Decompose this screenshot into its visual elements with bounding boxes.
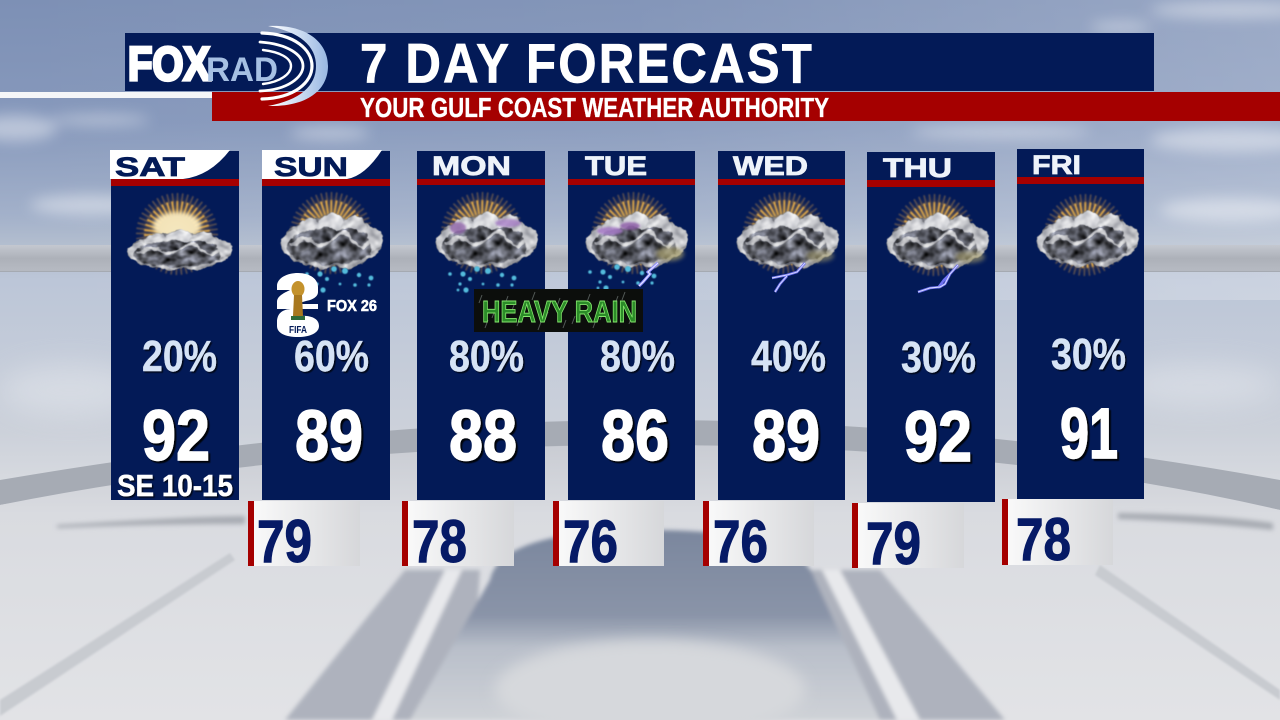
high temperature: 89	[752, 397, 820, 476]
icon: storm cloud, lightning	[737, 191, 839, 292]
FIFA wordmark: FIFA	[289, 325, 307, 336]
red subtitle bar	[212, 92, 1280, 121]
day label: SAT	[110, 150, 230, 182]
logo: FIFA World Cup 26 and FOX 26	[277, 273, 377, 337]
day label: FRI: FRI	[1032, 150, 1081, 180]
day label: SUN	[262, 150, 382, 182]
logo: FOX RAD: RAD	[206, 51, 278, 89]
low temperature: Sunday: 79	[257, 508, 312, 575]
panel: Sunday	[262, 150, 390, 500]
low temperature: Thursday	[852, 503, 964, 577]
rain chance: 20%	[142, 332, 217, 381]
day label: THU: THU	[883, 153, 952, 183]
navy title bar	[125, 33, 1154, 91]
low temperature: Friday	[1002, 499, 1113, 573]
low temperature: Wednesday	[703, 501, 814, 575]
day label: MON: MON	[432, 151, 511, 181]
white rule	[0, 92, 212, 98]
low temperature: Tuesday	[553, 501, 664, 575]
panel: Wednesday	[718, 151, 845, 500]
numeral 2	[277, 273, 318, 309]
low temperature: Monday	[402, 501, 514, 575]
icon: partly cloudy sun	[127, 192, 233, 276]
day label: SAT: SAT	[115, 152, 186, 182]
icon: storm cloud, showers	[436, 191, 538, 293]
tub	[285, 530, 1005, 720]
heading: 7 day forecast: 7 DAY FORECAST	[360, 33, 814, 95]
panel: Thursday	[867, 152, 995, 502]
rain chance: 40%	[751, 332, 826, 381]
callout: heavy rain	[474, 289, 643, 332]
low temperature: Monday: 78	[412, 508, 467, 575]
rain chance: 80%	[449, 332, 524, 381]
wind: SE 10-15	[117, 468, 233, 503]
low temperature: Thursday: 79	[866, 510, 921, 577]
header: title banner	[0, 33, 1280, 123]
panel: Monday	[417, 151, 545, 500]
panel: Tuesday	[568, 151, 695, 500]
day label: WED: WED	[733, 151, 808, 181]
high temperature: 89	[295, 397, 363, 476]
icon: storm cloud, showers, lightning	[586, 191, 688, 291]
callout: heavy rain: HEAVY RAIN	[482, 294, 637, 329]
logo: FOX RAD: FOX	[128, 37, 210, 90]
subtitle: YOUR GULF COAST WEATHER AUTHORITY	[360, 92, 829, 123]
floor ring	[0, 420, 1280, 510]
icon: mostly cloudy sun	[1037, 193, 1139, 277]
rain chance: 60%	[294, 332, 369, 381]
logo: FOX RAD	[128, 26, 328, 106]
icon: storm cloud, lightning	[887, 193, 989, 292]
numeral 6	[277, 309, 319, 337]
panel: Friday	[1017, 149, 1144, 499]
low temperature: Sunday	[248, 501, 360, 575]
icon: trophy	[291, 281, 305, 320]
rain chance: 80%	[600, 332, 675, 381]
low temperature: Wednesday: 76	[713, 508, 768, 575]
rain chance: 30%	[901, 333, 976, 382]
high temperature: 86	[601, 397, 669, 476]
low temperature: Tuesday: 76	[563, 508, 618, 575]
high temperature: 91	[1060, 395, 1118, 474]
panel: Saturday	[110, 150, 239, 503]
FOX 26 wordmark: FOX 26	[327, 298, 377, 315]
icon: sun, cloud, showers	[281, 191, 383, 293]
rain chance: 30%	[1051, 330, 1126, 379]
day label: SUN: SUN	[274, 152, 348, 182]
low temperature: Friday: 78	[1016, 506, 1071, 573]
day label: TUE: TUE	[585, 151, 647, 181]
high temperature: 88	[449, 397, 517, 476]
high temperature: 92	[904, 398, 972, 477]
high temperature: 92	[142, 397, 210, 476]
